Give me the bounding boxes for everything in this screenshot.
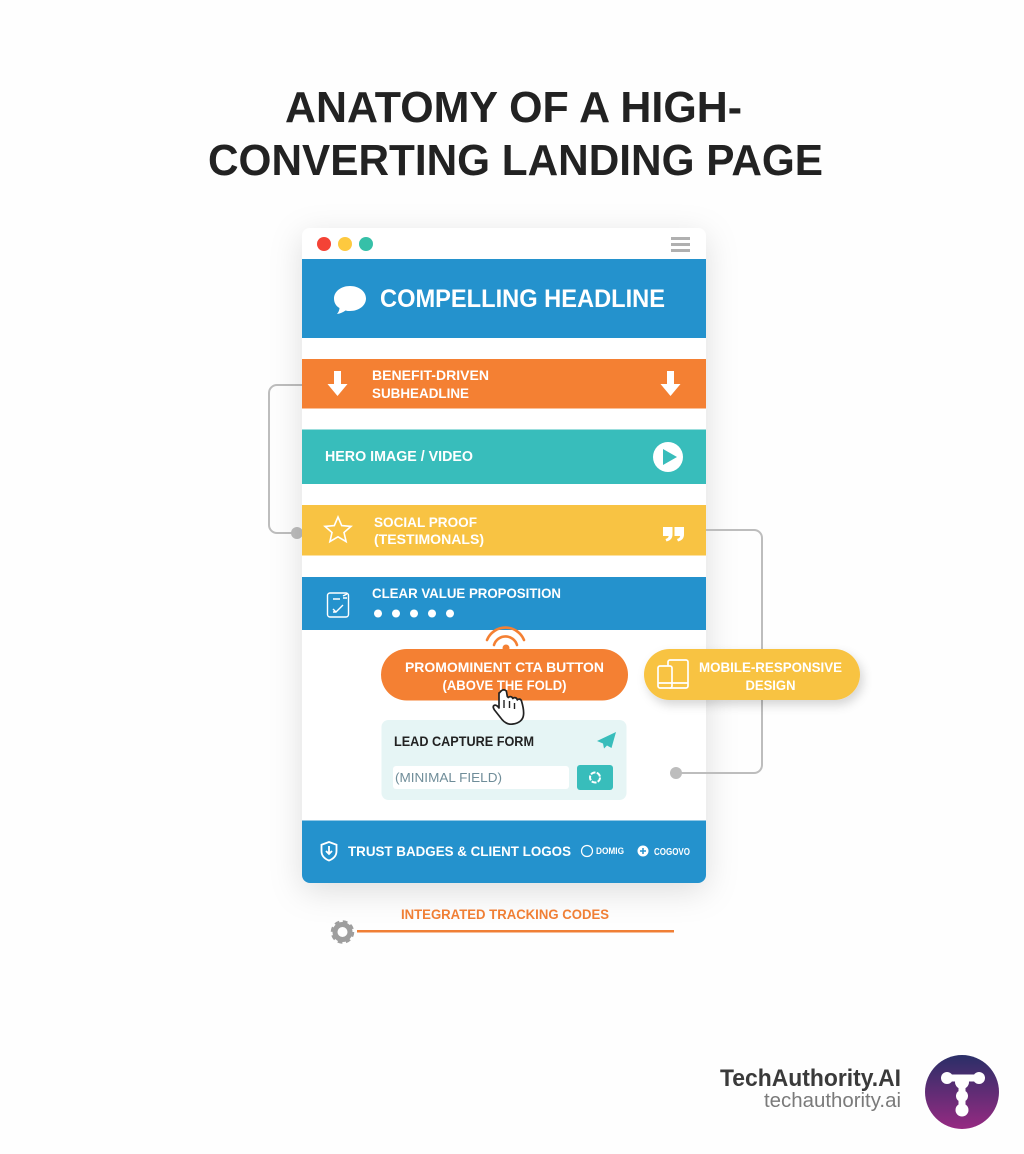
- client logo two: [638, 846, 690, 858]
- callout: mobile-responsive design: DESIGN: [746, 677, 796, 693]
- title: ANATOMY OF A HIGH-: [285, 83, 742, 132]
- panel: browser card: [302, 228, 706, 883]
- client logo one: [582, 846, 624, 856]
- panel: lead capture form: [382, 720, 626, 800]
- pagination dots: [374, 610, 454, 618]
- callout: mobile-responsive design: [644, 649, 860, 700]
- value proposition text: CLEAR VALUE PROPOSITION: [372, 585, 561, 601]
- tracking line: [357, 930, 674, 932]
- icon: brand logo: [925, 1055, 999, 1129]
- title: [208, 83, 823, 185]
- client logo two: COGOVO: [654, 847, 690, 858]
- connector: social proof to mobile design: [670, 530, 762, 779]
- form submit button: [577, 765, 613, 790]
- panel: benefit-driven subheadline: [302, 359, 706, 408]
- icon: star: [325, 517, 351, 542]
- subheadline text: BENEFIT-DRIVEN: [372, 367, 489, 383]
- icon: paper plane: [597, 732, 616, 748]
- social proof text: SOCIAL PROOF: [374, 514, 477, 530]
- client logo one: DOMIG: [596, 846, 624, 856]
- icon: hamburger menu: [671, 237, 690, 252]
- icon: down arrow left: [328, 371, 348, 396]
- panel: social proof: [302, 505, 706, 556]
- CTA button: [381, 649, 628, 700]
- subheadline text: [372, 367, 489, 401]
- icon: quotation marks: [663, 527, 684, 542]
- panel: clear value proposition: [302, 577, 706, 630]
- headline text: COMPELLING HEADLINE: [380, 285, 665, 313]
- panel: compelling headline: [302, 259, 706, 338]
- panel: trust badges and client logos: [302, 820, 706, 883]
- subheadline text: SUBHEADLINE: [372, 385, 469, 401]
- hero text: HERO IMAGE / VIDEO: [325, 449, 473, 465]
- CTA button: (ABOVE THE FOLD): [442, 677, 566, 693]
- mobile design text: MOBILE-RESPONSIVE: [699, 659, 842, 675]
- window controls: [317, 237, 373, 251]
- icon: phone and tablet: [658, 660, 688, 688]
- panel: hero image / video: [302, 430, 706, 484]
- connector: subheadline to social proof: [269, 385, 303, 539]
- form input field: (MINIMAL FIELD): [395, 770, 502, 785]
- icon: shield: [322, 842, 336, 860]
- form input field: [393, 766, 569, 789]
- brand name: techauthority.ai: [764, 1090, 901, 1112]
- CTA button: PROMOMINENT CTA BUTTON: [405, 659, 604, 675]
- title: CONVERTING LANDING PAGE: [208, 136, 823, 185]
- social proof text: (TESTIMONALS): [374, 531, 484, 547]
- icon: speech bubble: [334, 286, 366, 314]
- icon: down arrow right: [660, 371, 680, 396]
- brand name: [720, 1065, 901, 1112]
- icon: checklist: [328, 593, 348, 617]
- form title: LEAD CAPTURE FORM: [394, 734, 534, 749]
- label: integrated tracking codes: INTEGRATED TRACKING CODES: [401, 907, 609, 922]
- icon: signal waves: [487, 628, 524, 652]
- social proof text: [374, 514, 484, 547]
- icon: gear: [332, 922, 352, 942]
- brand name: TechAuthority.AI: [720, 1065, 901, 1092]
- icon: play button: [653, 442, 683, 472]
- icon: hand cursor: [493, 690, 524, 724]
- trust badges text: TRUST BADGES & CLIENT LOGOS: [348, 843, 571, 859]
